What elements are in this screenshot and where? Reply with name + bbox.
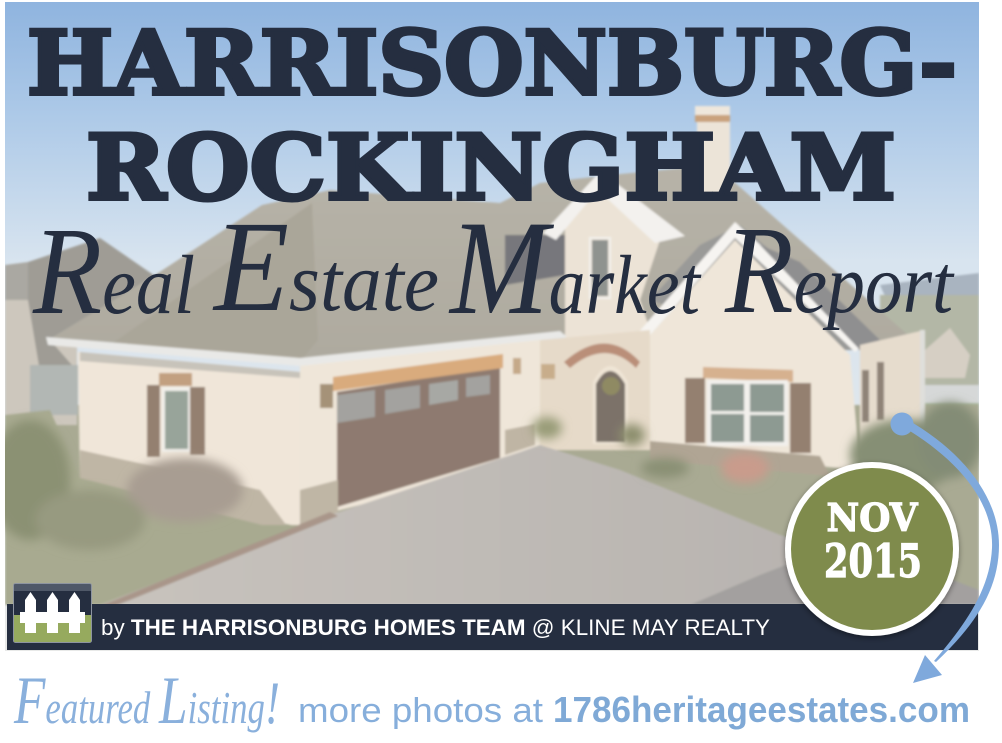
word: Real: Real: [32, 203, 195, 341]
driveway: [102, 444, 786, 604]
right shaded roof and front gable: [650, 225, 860, 350]
garage wall: [78, 352, 305, 528]
title line 1: HARRISONBURG-: [27, 11, 957, 115]
right side wing: [858, 330, 921, 441]
neighbouring house on left: [5, 238, 155, 425]
garage side window: [147, 373, 205, 457]
date badge: Nov 2015: [785, 462, 959, 636]
arrow dot: [890, 412, 914, 436]
badge text: [824, 495, 922, 588]
garage door: [320, 354, 503, 507]
chimney: [695, 106, 730, 196]
left lawn: [5, 410, 298, 530]
distant hills and lawn on right: [878, 272, 979, 406]
website call to action: [298, 689, 970, 730]
script subtitle: Real Estate Market Report: [32, 194, 955, 343]
arrow curve: [905, 420, 999, 662]
word: Market: Market: [448, 194, 702, 343]
title: Harrisonburg-Rockingham: [27, 11, 957, 221]
badge text: 2015: [824, 534, 922, 588]
featured listing script label: Featured Listing!: [13, 662, 280, 738]
arrow from house to website: [890, 412, 999, 683]
upper dormer gable: [505, 176, 685, 345]
roof eaves: [46, 331, 567, 366]
stone foundation: [80, 424, 830, 530]
main roof: [48, 165, 908, 362]
more photos text: more photos at: [298, 692, 544, 730]
arrow head: [913, 655, 942, 683]
title line 2: ROCKINGHAM: [86, 115, 896, 221]
ground base: [5, 405, 979, 605]
word: Report: Report: [724, 202, 955, 340]
byline text: by THE HARRISONBURG HOMES TEAM @ KLINE MAY REALTY: [101, 615, 770, 640]
website url: 1786heritageestates.com: [553, 689, 970, 730]
icon: picket fence logo: [14, 584, 92, 642]
byline bar: [7, 604, 978, 650]
shrubs: [0, 402, 982, 550]
word: Estate: Estate: [212, 195, 439, 339]
centre entry: [513, 330, 650, 450]
front picture window: [685, 367, 811, 453]
badge text: NOV: [826, 495, 919, 540]
